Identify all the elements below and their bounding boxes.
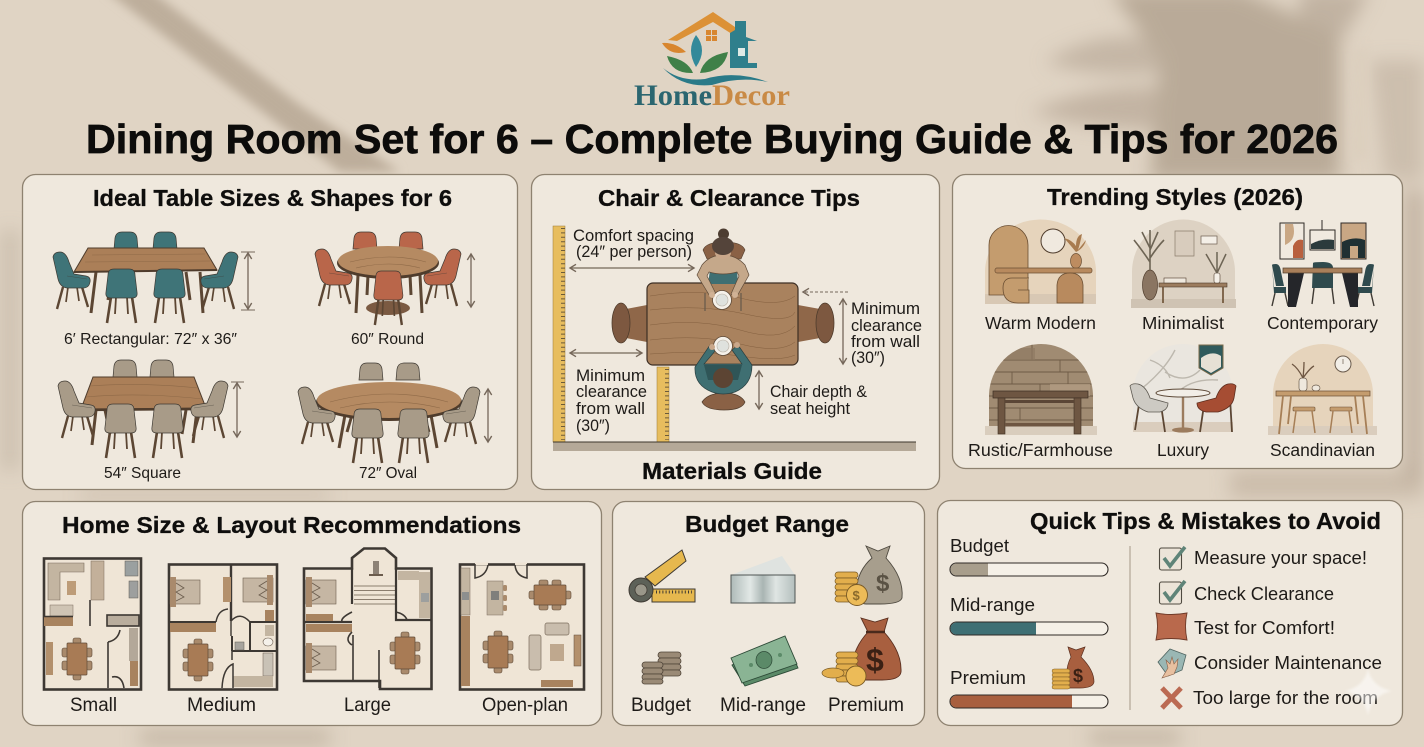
bottom chair: [702, 393, 745, 410]
label: oval: 72″ Oval: [359, 465, 417, 482]
text: comfort spacing: (24″ per person): [576, 243, 692, 261]
label: small: Small: [70, 695, 117, 716]
icon: rust money bag: [822, 618, 901, 686]
dimension arrow: rectangular: [241, 252, 255, 310]
label: scandinavian: Scandinavian: [1270, 440, 1375, 460]
bar: premium: [950, 695, 1108, 708]
label: minimalist: Minimalist: [1142, 313, 1224, 333]
icon: glass sample: [731, 556, 795, 603]
floor plan: open-plan: [460, 564, 584, 690]
bar: mid-range: [950, 622, 1108, 635]
floor line: [553, 442, 916, 451]
heading: budget range: Budget Range: [685, 511, 849, 537]
icon: cleaning hand: [1158, 649, 1186, 678]
icon: coin stacks: [642, 652, 681, 684]
dimension arrow: oval: [487, 389, 489, 442]
tip: clearance: Check Clearance: [1194, 583, 1334, 604]
heading: quick tips: Quick Tips & Mistakes to Avoid: [1030, 508, 1381, 534]
panel: budget range: [612, 502, 924, 726]
icon: checkbox clearance: [1160, 581, 1185, 604]
label: square: 54″ Square: [104, 465, 181, 482]
logo wordmark: HomeDecor: [634, 79, 790, 112]
dashed arrow: table edge: [803, 291, 848, 293]
style: warm modern: [985, 220, 1096, 304]
icon: small money bag: [1052, 647, 1094, 689]
heading: chair and clearance: Chair & Clearance Tips: [598, 185, 860, 211]
oval table set: [298, 363, 480, 463]
heading: materials guide: Materials Guide: [642, 458, 822, 484]
label: large: Large: [344, 695, 391, 716]
label: premium: Premium: [828, 695, 904, 716]
text: chair depth: Chair depth &: [770, 383, 867, 401]
sparkle watermark: [1345, 669, 1392, 715]
floor plan: large: [304, 548, 432, 689]
panel: home size and layout: [22, 502, 602, 726]
side chairs: [612, 303, 834, 343]
style: luxury: [1130, 340, 1236, 435]
panel: ideal table sizes and shapes: [22, 174, 518, 490]
icon: grey money bag: $: [852, 588, 860, 603]
label: rectangular: 6′ Rectangular: 72″ x 36″: [64, 331, 237, 348]
text: right clearance: clearance: [851, 317, 922, 335]
seated person top: [697, 228, 749, 311]
icon: small money bag: $: [1073, 666, 1083, 686]
title: Dining Room Set for 6 – Complete Buying Guide & Tips for 2026: [86, 116, 1338, 162]
label: luxury: Luxury: [1157, 440, 1209, 460]
label: contemporary: Contemporary: [1267, 313, 1378, 333]
heading: trending styles: Trending Styles (2026): [1047, 184, 1303, 210]
tip: maintenance: Consider Maintenance: [1194, 652, 1382, 673]
label: medium: Medium: [187, 695, 256, 716]
arrow: right clearance: [842, 299, 844, 364]
arrow: comfort spacing: [570, 267, 694, 269]
label: mid-range bar: Mid-range: [950, 594, 1035, 615]
text: left clearance: Minimum: [576, 367, 645, 385]
floor plan: small: [44, 558, 141, 690]
rectangular table set: [53, 232, 238, 323]
label: mid-range: Mid-range: [720, 695, 806, 716]
label: round: 60″ Round: [351, 331, 424, 348]
label: open-plan: Open-plan: [482, 695, 568, 716]
text: comfort spacing: Comfort spacing: [573, 227, 694, 245]
tip: too large: Too large for the room: [1193, 687, 1378, 708]
text: right clearance: from wall: [851, 333, 920, 351]
panel: quick tips and mistakes: [938, 500, 1402, 726]
arrow: left clearance: [570, 352, 642, 354]
label: budget: Budget: [631, 695, 692, 716]
square table set: [58, 360, 228, 458]
label: budget bar: Budget: [950, 535, 1009, 556]
tip: comfort: Test for Comfort!: [1194, 617, 1335, 638]
floor plan: medium: [169, 564, 277, 690]
icon: rust money bag: $: [866, 642, 884, 678]
bar: budget: [950, 563, 1108, 576]
style: scandinavian: [1268, 344, 1377, 435]
text: right clearance: (30″): [851, 349, 885, 367]
dimension arrow: square: [231, 382, 244, 437]
icon: checkbox measure: [1160, 547, 1185, 570]
icon: cash: [731, 636, 798, 686]
panel: trending styles: [952, 174, 1402, 468]
seated person bottom: [695, 336, 752, 394]
text: chair depth: seat height: [770, 400, 850, 418]
text: left clearance: from wall: [576, 400, 645, 418]
label: premium bar: Premium: [950, 667, 1026, 688]
heading: table sizes: Ideal Table Sizes & Shapes for 6: [93, 185, 452, 211]
measuring rulers: [553, 226, 669, 442]
label: warm modern: Warm Modern: [985, 313, 1096, 333]
style: contemporary: [1272, 220, 1374, 307]
text: right clearance: Minimum: [851, 300, 920, 318]
text: left clearance: (30″): [576, 417, 610, 435]
icon: cushion: [1156, 613, 1187, 640]
label: rustic farmhouse: Rustic/Farmhouse: [968, 440, 1113, 460]
logo: HomeDecor: [634, 12, 790, 112]
round table set: [315, 232, 461, 325]
arrow: chair depth: [758, 371, 760, 409]
heading: home size: Home Size & Layout Recommendations: [62, 512, 521, 538]
icon: grey money bag: [835, 546, 902, 606]
icon: red cross: [1162, 688, 1181, 708]
icon: grey money bag: $: [876, 570, 890, 597]
dining table top view: [647, 283, 798, 365]
style: rustic farmhouse: [985, 340, 1100, 435]
icon: tape measure: [629, 550, 695, 602]
panel: chair and clearance tips: [532, 174, 940, 490]
text: left clearance: clearance: [576, 383, 647, 401]
style: minimalist: [1131, 219, 1236, 308]
dimension arrow: round: [470, 254, 472, 307]
tip: measure: Measure your space!: [1194, 547, 1367, 568]
